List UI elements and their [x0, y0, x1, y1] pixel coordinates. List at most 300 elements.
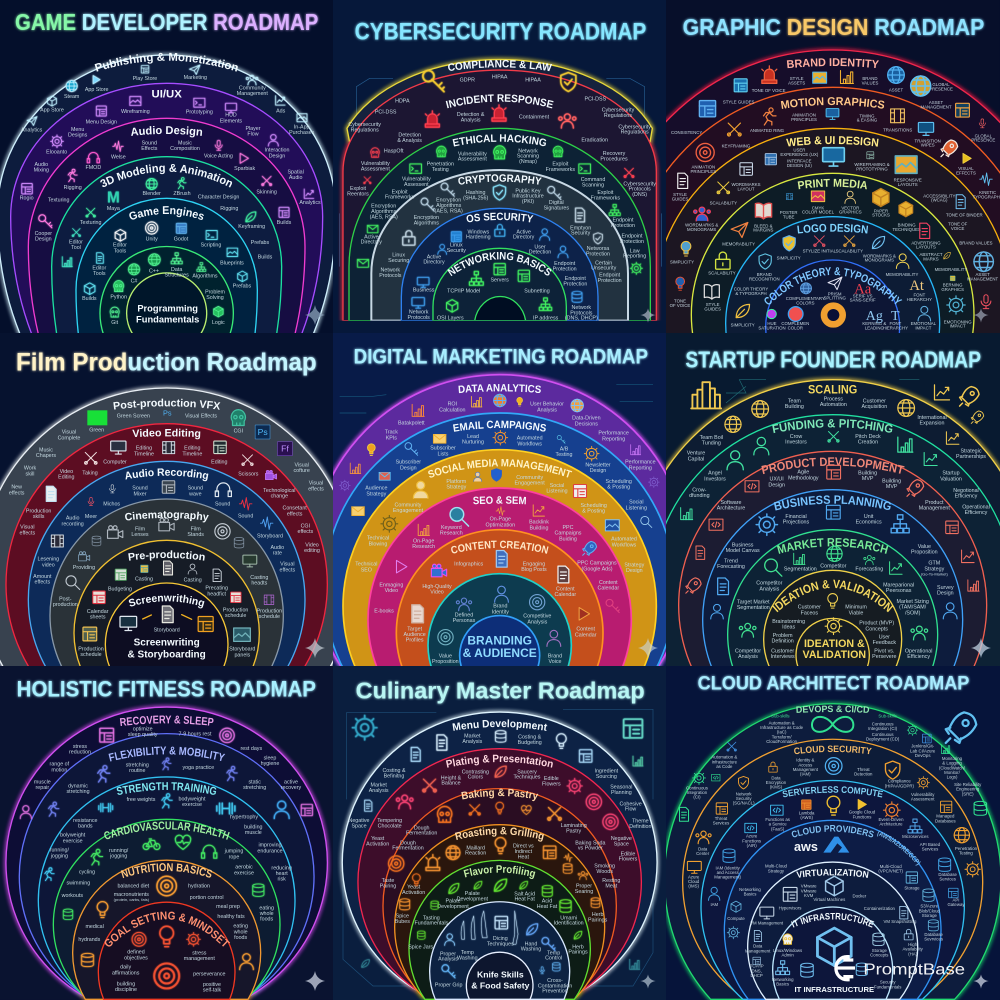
wordmark [740, 163, 752, 175]
platform: Platform [446, 479, 466, 485]
mvp: Building [882, 478, 901, 484]
film: Film [135, 526, 145, 532]
circuit decoration [343, 709, 653, 986]
video: Editing [58, 475, 75, 481]
ab: Testing [556, 452, 572, 458]
pen: Penetration [955, 846, 977, 851]
vuln: Assessment [911, 797, 935, 802]
funding: Crow- [692, 487, 706, 493]
concentric skill rings [311, 375, 689, 764]
bars [941, 745, 950, 754]
pose [98, 766, 110, 782]
icons [676, 66, 993, 324]
encryption: (AES, RSA) [370, 214, 398, 220]
running: jogging [50, 853, 68, 859]
audio: rate [273, 551, 282, 557]
performance: Performance [598, 431, 629, 437]
dumbbell [99, 803, 113, 812]
production: Production [26, 508, 51, 514]
problem: Problem [773, 633, 793, 639]
animation: PRINCIPLES [791, 117, 817, 122]
endpoint: Protection [611, 223, 635, 229]
network [922, 734, 931, 743]
shield [885, 761, 900, 779]
db [801, 963, 813, 977]
community: Community [395, 502, 421, 508]
scheduling: & Posting [607, 485, 630, 491]
unit: Economics [856, 520, 882, 526]
wordmarks: WORDMARKS [731, 182, 761, 187]
jars: Spice Jars [408, 945, 433, 951]
lower mask [333, 321, 667, 334]
Builds: Builds [258, 254, 273, 260]
color theory: COLOR THEORY [734, 287, 768, 292]
blog: Blog Posts [521, 567, 547, 573]
threat: Threat [715, 816, 727, 821]
link [557, 435, 565, 443]
lock mail [357, 259, 369, 267]
diagram [727, 742, 736, 751]
music: Chapers [36, 453, 56, 459]
protocols: Network [572, 305, 591, 311]
affirmations: affirmations [112, 970, 140, 976]
tex [918, 122, 934, 135]
vms: Virtual Machines [813, 897, 845, 902]
heading: Content Creation: CONTENT CREATION [451, 540, 548, 554]
network scanning: Network [518, 148, 538, 154]
venture: Venture [687, 451, 705, 457]
Cooper: Design [35, 237, 52, 243]
mic [88, 497, 94, 506]
audience: Audience [365, 486, 387, 492]
automated: Automated [611, 537, 637, 543]
chart [890, 562, 902, 574]
pose [227, 766, 237, 781]
tub [301, 804, 312, 816]
pen [736, 304, 749, 318]
heading: OS Security: OS SECURITY [466, 212, 534, 222]
animation: PRINCIPLES [690, 169, 716, 174]
croissant [521, 806, 531, 815]
casting: Casting [184, 577, 202, 583]
vfx: EFFECTS [956, 170, 976, 175]
container: Containerization [864, 906, 896, 911]
competitive: Competitive [523, 614, 551, 620]
monitor [823, 148, 844, 166]
endpoint: Protection [553, 266, 577, 272]
personas: Defined [455, 612, 473, 618]
emotioning: EMOTIONING [944, 319, 972, 324]
rocket [583, 541, 597, 555]
washing: Hand [525, 941, 537, 947]
Analytics: Analytics [21, 128, 43, 134]
people [696, 831, 711, 844]
heading: Ideation arc: IDEATION & VALIDATION [772, 580, 893, 612]
searing: Searing [575, 889, 593, 895]
analytics [27, 116, 37, 125]
tone: OF VOICE [670, 303, 690, 308]
exploit: Exploit [350, 186, 366, 192]
leaf [574, 931, 582, 939]
wire [867, 152, 874, 159]
stress: reduction [69, 750, 91, 756]
gear [965, 862, 980, 877]
ads [276, 96, 285, 105]
jenkins: Lab CI/Azure [910, 748, 936, 753]
doc [679, 807, 689, 821]
Prefabs: Prefabs [251, 240, 270, 246]
market: Analysis [462, 739, 483, 745]
vector [845, 191, 855, 203]
social: Social [629, 500, 644, 506]
net [539, 298, 552, 310]
sizing: /SOM) [905, 610, 921, 616]
fats: healthy fats [217, 914, 245, 920]
ff [278, 442, 292, 456]
jenkins: DevOps [915, 753, 930, 758]
tempering: Tempering [377, 818, 402, 824]
command: Scanning [582, 182, 604, 188]
bars [950, 276, 955, 281]
grill [426, 854, 440, 870]
concentric skill rings [603, 50, 1000, 509]
network: Network [736, 791, 752, 796]
pivot: Persevere [872, 654, 897, 660]
proper: Analysis [438, 957, 458, 963]
mixer: Mixer [133, 491, 147, 497]
stress: stress [192, 950, 206, 956]
vector: VECTOR [841, 205, 859, 210]
Unity: Unity [146, 236, 158, 242]
panel: holistic fitness roadmap [0, 666, 333, 1000]
video: Video [430, 590, 444, 596]
sheet [115, 569, 126, 580]
panel: graphic design roadmap [666, 0, 1000, 333]
dashboard [624, 719, 642, 738]
tasting: Tasting [423, 915, 440, 921]
endpoint: Protection [563, 281, 587, 287]
sound: Sound [238, 513, 253, 519]
title: Culinary Master Roadmap [356, 677, 645, 703]
checklist [83, 627, 97, 641]
db [974, 801, 987, 815]
app store [47, 96, 56, 106]
heading: Cryptography: CRYPTOGRAPHY [458, 174, 542, 185]
protocols: Protocols [408, 315, 430, 321]
wheel [824, 306, 843, 324]
mixer: Sound [132, 486, 148, 492]
design: UX/UI [770, 477, 784, 483]
calendar: Calendar [555, 592, 576, 598]
yoga: yoga practice [182, 765, 214, 771]
crow: Crow [790, 434, 802, 440]
edible: Edible [544, 776, 559, 782]
endpoint: Endpoint [554, 261, 575, 267]
network [609, 204, 620, 216]
bulb [367, 444, 375, 455]
hydration: hydration [188, 883, 210, 889]
net: Networking [772, 977, 793, 982]
heart [175, 835, 191, 849]
image [813, 72, 827, 83]
startup: Valuation [940, 476, 962, 482]
circuit decoration [673, 380, 986, 563]
cohesive: Cohesive [620, 801, 642, 807]
layers [447, 300, 458, 312]
ppc: (Google Ads) [581, 566, 613, 572]
automated: Workflows [517, 441, 542, 447]
vulnerability: Vulnerability [458, 151, 487, 157]
HUD: HUD [225, 113, 237, 119]
workouts: workouts [62, 893, 83, 899]
wave: wave [189, 491, 202, 497]
visual: Visual [280, 562, 295, 568]
salt: Salt Acid [514, 891, 535, 897]
kerning: KERNING & [862, 321, 886, 326]
doc [496, 550, 507, 567]
search [66, 576, 80, 590]
schedule: schedule [225, 613, 246, 619]
cd: Continuous [872, 732, 894, 737]
Menu Designs: Designs [68, 133, 88, 139]
flask [676, 277, 685, 290]
comp: Analysis [738, 654, 758, 660]
heading: Branding & Audience: BRANDING [467, 634, 532, 648]
video: editing [304, 548, 320, 554]
hypertrophy: hypertrophy [230, 814, 258, 820]
bleed: BLEED & [754, 223, 772, 228]
linux: Linux [450, 243, 463, 249]
seasonal: Planning [611, 790, 632, 796]
product: Management [919, 506, 950, 512]
net: Networking [739, 887, 761, 892]
ppc: Campaigns [555, 531, 582, 537]
strategic: Strategic [960, 448, 982, 454]
C#: C# [131, 279, 137, 285]
direct: Direct vs [513, 844, 534, 850]
target: Profiles [406, 638, 424, 644]
theme: Theme [632, 819, 649, 825]
gtm: (Go-To-Market) [921, 571, 949, 576]
spice: Spice [396, 914, 409, 920]
storage: Storage [904, 885, 920, 890]
pen: Testing [959, 851, 973, 856]
vm [760, 907, 774, 919]
hue: HUE [767, 321, 777, 326]
event: Architecture [879, 822, 903, 827]
taking: Taking [82, 470, 98, 476]
schedule: Production [223, 607, 248, 613]
heading: Motion Graphics: MOTION GRAPHICS [780, 97, 884, 109]
panels [234, 628, 250, 641]
canvas: Model Canvas [726, 548, 760, 554]
protocols: (DNS) [632, 192, 647, 198]
binder: TONE OF BINDER [946, 213, 983, 218]
multi: Strategy [768, 868, 785, 873]
builds [279, 207, 289, 217]
exploit: Frameworks [385, 195, 415, 201]
bowl [97, 902, 108, 918]
micro: Microservices [902, 834, 929, 839]
newsletter: Design [590, 468, 606, 474]
windows: Hardening [466, 235, 491, 241]
visual: effects [20, 530, 35, 536]
medical: medical [85, 924, 104, 930]
concentric skill rings [633, 380, 1000, 779]
Editor Tool: Tool [71, 245, 81, 251]
Player: Player [245, 126, 261, 132]
dynamic: stretching [66, 789, 90, 795]
on-page: Research [412, 544, 435, 550]
bulb gear [160, 926, 173, 947]
jar [418, 931, 425, 939]
portion: portion control [190, 895, 224, 901]
Cooper: Cooper [35, 231, 52, 237]
endpoint: Endpoint [565, 276, 586, 282]
hashing: Hashing [466, 190, 485, 196]
yoga [162, 758, 171, 770]
directory: Directory [423, 260, 445, 266]
heading: Email Campaigns: EMAIL CAMPAIGNS [453, 420, 546, 432]
production: skills [33, 514, 45, 520]
market: Analysis [369, 788, 389, 794]
encryption: Encryption [371, 204, 396, 210]
heading: Screenwriting & Storyboarding: Screenwriting [134, 638, 200, 649]
amount: effects [35, 580, 50, 586]
Skinning: Skinning [256, 190, 277, 196]
therm [542, 937, 555, 951]
gear [693, 772, 705, 784]
bars [968, 580, 979, 591]
eating: eating [259, 905, 274, 911]
shield [493, 185, 506, 200]
heading: Audio Recording: Audio Recording [126, 468, 208, 482]
mvp: MVP [862, 476, 874, 482]
vulnerability: Assessment [458, 157, 487, 163]
title: HOLISTIC FITNESS ROADMAP [17, 677, 316, 702]
Ag: Ag [866, 309, 883, 324]
Editor Tool: Editor [69, 239, 83, 245]
lesening: Lesening [38, 557, 59, 563]
book [734, 79, 747, 92]
chart [934, 385, 949, 400]
gear [727, 927, 739, 939]
simplicity: SIMPLICITY [731, 323, 755, 328]
bread [412, 874, 420, 885]
kerning: LEADING [865, 325, 884, 330]
protocols: Network [409, 310, 428, 316]
Voice Acting: Voice Acting [204, 153, 233, 159]
palate: Development [437, 904, 469, 910]
keyword: Research [440, 531, 463, 537]
mic [979, 119, 985, 128]
containment: Containment [519, 115, 550, 121]
heading: Networking Basics: NETWORKING BASICS [447, 252, 552, 276]
lock [716, 252, 730, 269]
typewriter [120, 616, 137, 630]
eating: whole [260, 911, 274, 917]
asset mgmt: MANAGEMENT [920, 104, 952, 109]
doc [575, 208, 585, 222]
db: Services [939, 877, 956, 882]
pie [571, 399, 583, 412]
frame [605, 520, 619, 531]
track: Track [385, 430, 398, 436]
height: Balance [441, 781, 461, 787]
UX UI: EXPERIENCE (UX) [780, 152, 819, 157]
green: Green [89, 428, 104, 434]
pin [469, 804, 480, 815]
resistance: bands [78, 824, 93, 830]
endpoint: Endpoint [612, 218, 634, 224]
vulnerability: Assessment [361, 166, 390, 172]
palate: Palate [445, 899, 461, 905]
layout [895, 156, 917, 173]
lock [716, 803, 727, 814]
wordmarks: WORDMARKS & [863, 253, 896, 258]
running: running/ [109, 848, 128, 854]
frame [946, 521, 958, 534]
Keyframing: Keyframing [238, 224, 265, 230]
responsive: LAYOUTS [898, 182, 918, 187]
keyword: Keyword [441, 525, 462, 531]
pie [494, 394, 506, 407]
ppc: Buiding [559, 536, 577, 542]
responsive: RESPONSIVE [894, 178, 922, 183]
calendar: Calendar [87, 609, 108, 615]
burst [883, 802, 900, 819]
encryption: Encryption [414, 215, 439, 221]
discipline: building [117, 981, 135, 987]
track: KPIs [386, 435, 397, 441]
international: Expansion [920, 421, 944, 427]
sizing: Market Sizing [897, 599, 929, 605]
globe [888, 67, 904, 83]
taste: Pairing [380, 883, 396, 889]
sparkle [973, 308, 989, 323]
Music: Music [178, 140, 192, 146]
code [771, 805, 783, 815]
vulnerability: Vulnerability [361, 161, 390, 167]
simplicity: SIMPLICITY [777, 255, 801, 260]
Data Structures: Structures [165, 273, 189, 279]
agile: Agile [797, 470, 809, 476]
shield [783, 236, 795, 251]
heading: Market: MARKET RESEARCH [777, 538, 888, 554]
bottle [400, 899, 410, 910]
prism: PRISM [828, 291, 842, 296]
comp: Competitor [756, 581, 782, 587]
skill labels [355, 402, 656, 665]
runner [91, 849, 103, 865]
temp: Temp [547, 950, 560, 956]
prism: SPLITTING [823, 296, 846, 301]
blender [146, 178, 157, 190]
heading: Logo Design: LOGO DESIGN [797, 224, 868, 234]
seeds [578, 872, 588, 880]
Character Design: Character Design [198, 195, 239, 201]
operational: Efficiency [965, 510, 988, 516]
skinning [262, 176, 272, 186]
concentric skill rings [6, 707, 327, 999]
audio: Audio [66, 516, 79, 522]
roi: Calculation [439, 407, 466, 413]
detection: Detection & [457, 112, 484, 118]
Prototyping: Prototyping [186, 109, 213, 115]
film [891, 109, 904, 123]
user [540, 229, 550, 240]
heading: Programming Fundamentals: Programming [137, 304, 198, 314]
